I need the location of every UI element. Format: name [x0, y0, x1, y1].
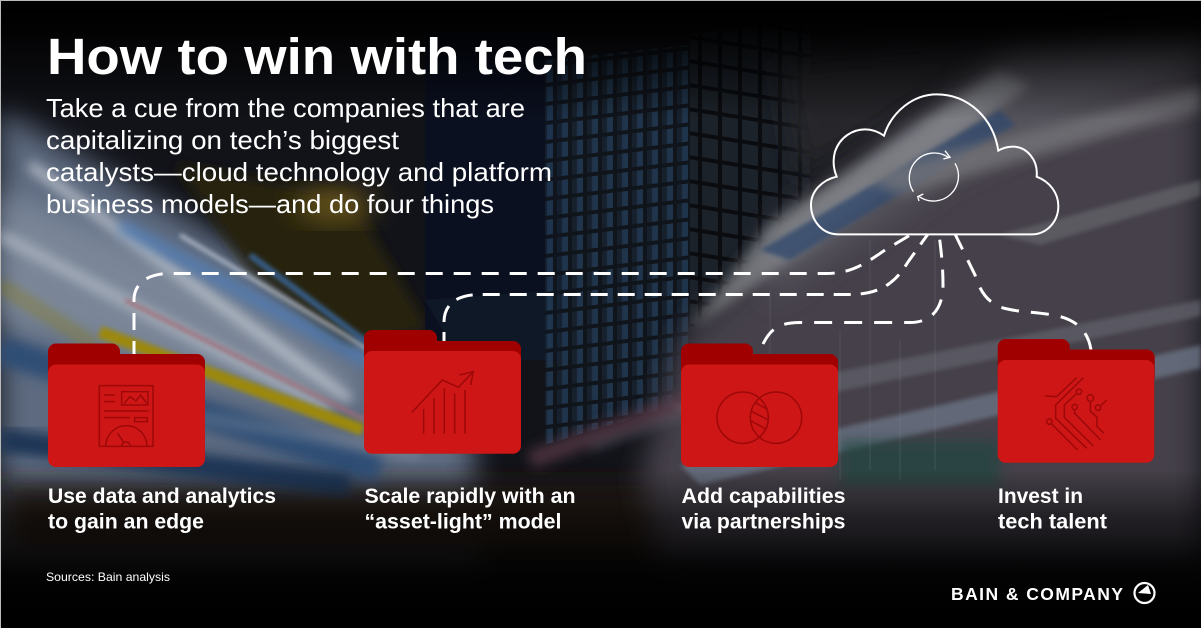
- icon: cloud with sync arrows: [811, 94, 1058, 234]
- logo: Bain & Company: BAIN & COMPANY: [951, 584, 1123, 604]
- panel: folder 1, data and analytics: [48, 344, 205, 467]
- source note: Sources: Bain analysis: [46, 570, 170, 584]
- label: scale rapidly: Scale rapidly with an: [364, 485, 576, 508]
- icon: overlapping circles: [717, 392, 802, 443]
- label: invest in tech talent: [998, 485, 1107, 534]
- panel: folder 4, tech talent: [998, 339, 1155, 463]
- label: add capabilities: via partnerships: [682, 510, 846, 534]
- subtitle text block: business models—and do four things: [46, 189, 494, 219]
- icon: rising chart with arrow: [412, 372, 473, 434]
- icon: report with gauge: [99, 386, 153, 446]
- subtitle text block: catalysts—cloud technology and platform: [46, 157, 552, 187]
- label: invest in tech talent: Invest in: [998, 485, 1083, 508]
- label: use data and analytics: [48, 485, 276, 534]
- label: use data and analytics: to gain an edge: [48, 510, 204, 534]
- subtitle text block: Take a cue from the companies that are: [46, 93, 525, 123]
- label: invest in tech talent: tech talent: [998, 510, 1107, 534]
- subtitle text block: [46, 93, 552, 219]
- icon: circuit traces: [1045, 378, 1107, 450]
- panel: folder 3, partnerships: [681, 344, 838, 467]
- label: use data and analytics: Use data and analytics: [48, 485, 276, 508]
- label: scale rapidly: [364, 485, 576, 534]
- label: scale rapidly: “asset-light” model: [364, 510, 562, 534]
- label: add capabilities: [682, 485, 846, 534]
- label: add capabilities: Add capabilities: [682, 485, 846, 508]
- subtitle text block: capitalizing on tech’s biggest: [46, 125, 400, 155]
- title: How to win with tech: [47, 28, 587, 85]
- dashed connectors from cloud to folders: [134, 234, 1091, 354]
- panel: folder 2, asset-light scaling: [364, 330, 521, 454]
